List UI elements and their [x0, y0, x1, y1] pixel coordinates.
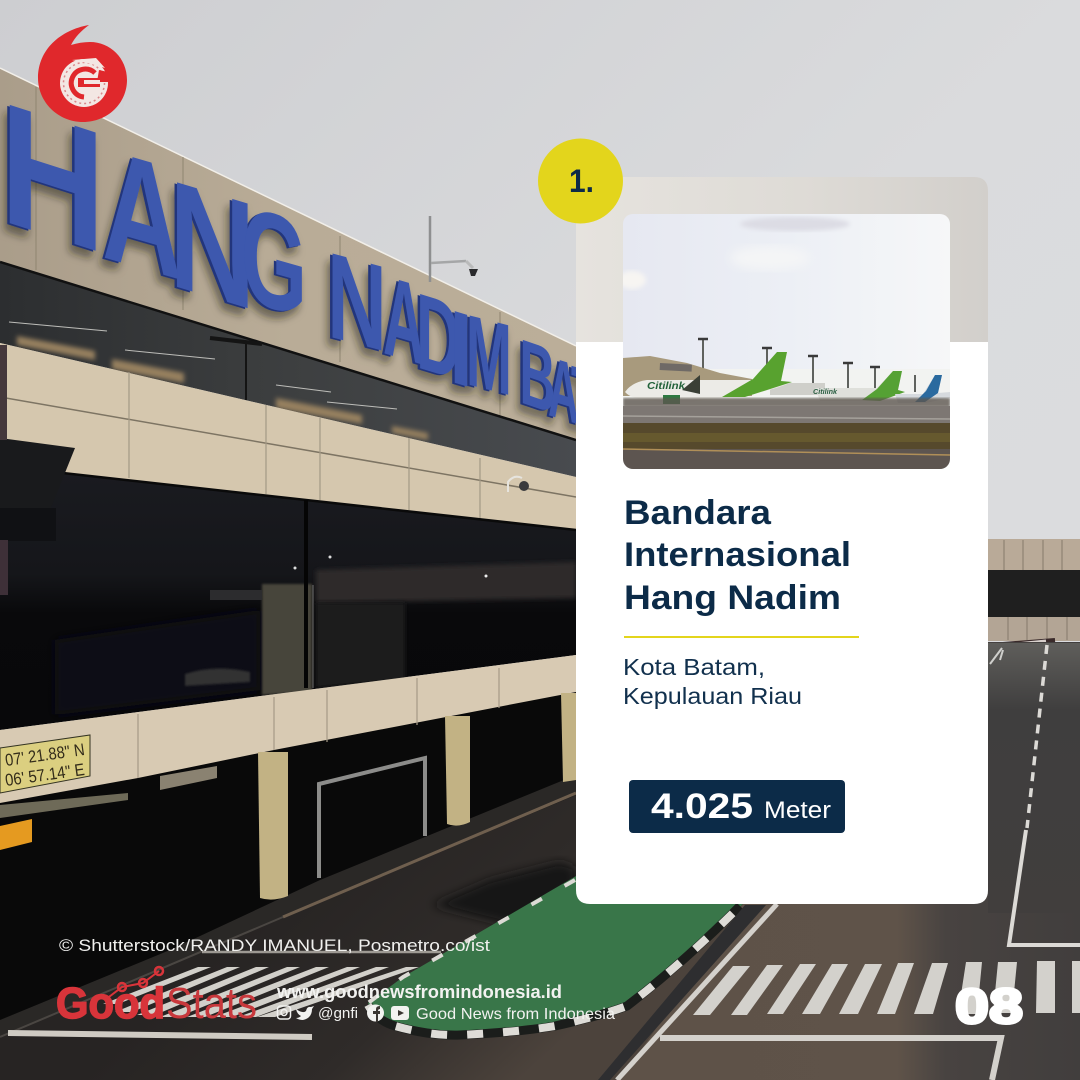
building sign: HANG NADIM BAT: T	[571, 348, 596, 447]
card white body	[576, 342, 988, 904]
number badge	[538, 138, 623, 224]
plane three	[895, 375, 950, 403]
main glass	[0, 466, 576, 730]
plane one	[625, 352, 792, 404]
apron ground	[576, 642, 1080, 1080]
vent strip	[0, 793, 128, 818]
tyre stain on road	[432, 862, 576, 925]
building sign: HANG NADIM BAT: B	[520, 319, 556, 434]
logo: GoodStats	[56, 967, 257, 1028]
lower storey	[0, 680, 576, 1037]
building sign: HANG NADIM BAT: D	[416, 269, 461, 404]
upper window band	[0, 262, 576, 477]
middle beige band	[0, 343, 576, 530]
orange sign	[0, 819, 32, 850]
soffit panel	[160, 766, 217, 790]
airport name heading	[624, 494, 851, 617]
covered walkway floor	[0, 775, 576, 1037]
lamp posts	[698, 339, 915, 392]
entrance door	[319, 758, 425, 878]
building, left	[0, 64, 596, 1037]
website and social footer: Good News from Indonesia	[416, 1006, 615, 1023]
website and social footer: www.goodnewsfromindonesia.id	[276, 982, 562, 1002]
building sign: HANG NADIM BAT: A	[548, 339, 579, 443]
grass	[623, 423, 950, 450]
top fascia	[0, 68, 576, 440]
building sign: HANG NADIM BAT: I	[449, 287, 473, 411]
plane two: Citilink	[813, 387, 838, 396]
location text	[623, 654, 802, 709]
left crosswalk stripes	[103, 967, 419, 1017]
page number: 08	[955, 980, 1023, 1034]
road edge lines	[8, 952, 441, 1037]
airport name heading: Internasional	[624, 536, 851, 574]
logo: GoodStats: Good	[56, 979, 165, 1028]
ground floor columns	[258, 693, 576, 900]
taxi lane lines	[598, 904, 1001, 1080]
yellow divider	[624, 636, 859, 638]
right apron markings	[988, 643, 1080, 945]
plane one: Citilink	[647, 380, 686, 392]
building sign: HANG NADIM BAT: G	[241, 177, 307, 347]
lower beige band	[0, 655, 576, 803]
number badge: 1.	[569, 163, 594, 199]
plane two	[813, 371, 905, 401]
security camera	[508, 477, 529, 492]
building sign: HANG NADIM BAT: A	[383, 252, 425, 390]
service vehicles	[623, 398, 950, 407]
green island	[368, 860, 745, 1034]
website and social footer	[276, 982, 615, 1023]
right terminal wing	[988, 539, 1080, 645]
location text: Kota Batam,	[623, 654, 765, 680]
apron	[623, 406, 950, 423]
website and social footer: @gnfi	[318, 1005, 358, 1022]
icon: facebook	[367, 1004, 384, 1022]
airport photo	[618, 214, 950, 469]
icon: youtube	[391, 1006, 409, 1020]
building sign: HANG NADIM BAT: N	[169, 147, 256, 343]
logo: GoodStats: Stats	[166, 979, 257, 1028]
runway length badge: Meter	[764, 797, 831, 824]
island kerb, curved side	[368, 906, 740, 1035]
window reflections	[9, 322, 428, 440]
island kerb, road side	[368, 880, 575, 1003]
building sign: HANG NADIM BAT: H	[0, 64, 105, 291]
glass reflections	[55, 500, 576, 715]
runway length badge	[629, 780, 845, 833]
building sign: HANG NADIM BAT: M	[466, 294, 512, 418]
hanging lamp	[0, 438, 75, 474]
photo credit: © Shutterstock/RANDY IMANUEL, Posmetro.co/ist	[59, 936, 490, 955]
building sign: HANG NADIM BAT: N	[327, 227, 387, 378]
boarding bridge	[770, 383, 825, 395]
road surface	[0, 790, 760, 1080]
terminal	[623, 356, 752, 396]
building sign: HANG NADIM BAT	[0, 104, 576, 438]
right crosswalk stripes	[693, 961, 1080, 1015]
logo: GNFI	[38, 25, 127, 122]
icon: twitter	[296, 1006, 314, 1020]
airport name heading: Bandara	[624, 494, 772, 532]
building sign: HANG NADIM BAT: A	[102, 115, 182, 314]
panel: airport card	[538, 138, 988, 904]
icon: instagram	[278, 1006, 290, 1019]
pole with camera	[430, 216, 478, 282]
coordinates plate: 06' 57.14" E	[4, 760, 86, 790]
coordinates plate: 07' 21.88" N	[4, 740, 86, 770]
location text: Kepulauan Riau	[623, 683, 802, 709]
taxiway	[623, 449, 950, 469]
runway length badge: 4.025	[651, 787, 753, 826]
coordinates plate	[0, 735, 90, 793]
airport name heading: Hang Nadim	[624, 579, 841, 617]
card translucent top	[576, 177, 988, 343]
